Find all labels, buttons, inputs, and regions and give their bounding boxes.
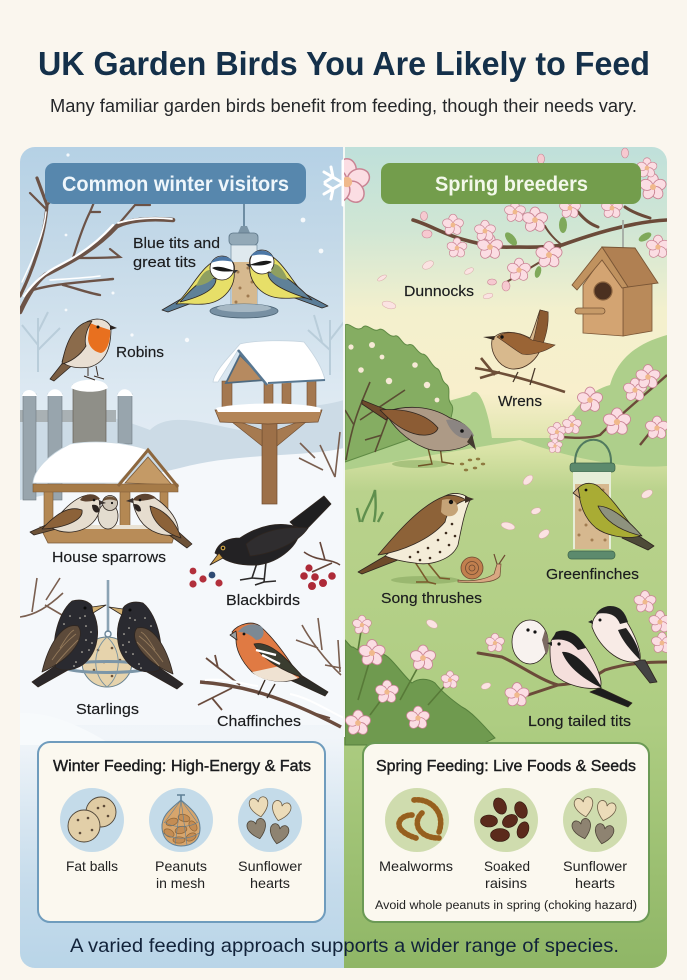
label: starlings: Starlings bbox=[76, 702, 139, 718]
icon: mealworms bbox=[385, 788, 449, 852]
green bush left bbox=[345, 324, 453, 462]
panel: infographic body bbox=[20, 147, 674, 968]
pale background bush bbox=[345, 335, 667, 470]
label: blackbirds: Blackbirds bbox=[226, 593, 300, 609]
seed scatter bbox=[460, 458, 485, 471]
label: dunnocks: Dunnocks bbox=[404, 284, 474, 300]
label: sunflower hearts: hearts bbox=[575, 875, 615, 891]
bird: blue tit bbox=[162, 256, 238, 312]
grass tuft bbox=[357, 490, 383, 522]
label: peanuts in mesh bbox=[155, 858, 207, 891]
berry twig bbox=[300, 542, 340, 590]
label: house sparrows: House sparrows bbox=[52, 550, 166, 566]
centre divider bbox=[343, 147, 345, 737]
bird: dunnock bbox=[362, 400, 476, 468]
panel: spring scene bbox=[344, 147, 674, 968]
label: peanuts in mesh: Peanuts bbox=[155, 858, 207, 874]
snow mound bbox=[20, 713, 112, 745]
bird: chaffinch bbox=[230, 623, 328, 698]
icon: sunflower hearts bbox=[563, 788, 627, 852]
label: soaked raisins: Soaked bbox=[484, 858, 530, 874]
bird: starlings bbox=[32, 600, 183, 689]
note: avoid whole peanuts: Avoid whole peanuts in spring (choking hazard) bbox=[375, 900, 637, 912]
label: fat balls: Fat balls bbox=[66, 858, 118, 874]
heading: spring breeders: Spring breeders bbox=[435, 173, 588, 196]
label: wrens: Wrens bbox=[498, 394, 542, 410]
panel: winter feeding bbox=[38, 742, 325, 922]
label: peanuts in mesh: in mesh bbox=[156, 875, 205, 891]
fence bbox=[20, 380, 133, 500]
label: chaffinches: Chaffinches bbox=[217, 714, 301, 730]
fat ball feeder bbox=[68, 580, 142, 688]
right blossom cluster bbox=[547, 365, 670, 454]
label: sunflower hearts: hearts bbox=[250, 875, 290, 891]
title: UK Garden Birds You Are Likely to Feed bbox=[38, 45, 650, 82]
bird: wren bbox=[475, 310, 565, 392]
label: blue tits and great tits: great tits bbox=[133, 255, 196, 271]
bird: long tailed tits bbox=[512, 606, 657, 707]
heading: common winter visitors bbox=[45, 163, 306, 204]
panel: winter scene bbox=[20, 147, 344, 968]
bird table bbox=[213, 341, 325, 504]
icon: soaked raisins bbox=[474, 788, 538, 852]
branch with blossoms: long tailed tits bbox=[478, 591, 674, 708]
subtitle: Many familiar garden birds benefit from feeding, though their needs vary. bbox=[50, 95, 637, 116]
birdhouse bbox=[572, 220, 658, 336]
snowflakes bbox=[64, 153, 324, 342]
bird: house sparrows bbox=[30, 494, 192, 548]
icon: fat balls bbox=[60, 788, 124, 852]
label: soaked raisins: raisins bbox=[485, 875, 527, 891]
blossom branch bbox=[413, 148, 671, 291]
label: sunflower hearts bbox=[563, 858, 627, 891]
snail bbox=[458, 554, 505, 582]
icon: half blossom bbox=[322, 159, 372, 206]
distant snowy hills bbox=[20, 400, 344, 510]
greenfinch feeder bbox=[568, 440, 615, 559]
bird: greenfinch bbox=[573, 483, 654, 550]
snow ground bbox=[20, 448, 343, 640]
falling petals bbox=[377, 259, 654, 691]
bird: blackbird bbox=[210, 496, 331, 585]
label: long tailed tits: Long tailed tits bbox=[528, 714, 631, 730]
heading: spring feeding: Spring Feeding: Live Foods & Seeds bbox=[376, 758, 636, 775]
house feeder bbox=[33, 442, 178, 543]
bottom left bush bbox=[344, 615, 495, 745]
heading: common winter visitors: Common winter visitors bbox=[62, 173, 289, 196]
label: sunflower hearts: Sunflower bbox=[563, 858, 627, 874]
label: blue tits and great tits bbox=[133, 236, 220, 271]
bush twigs bbox=[345, 382, 405, 460]
bush flowers bbox=[348, 342, 439, 402]
label: mealworms: Mealworms bbox=[379, 858, 453, 874]
label: soaked raisins bbox=[484, 858, 530, 891]
icon: sunflower hearts bbox=[238, 788, 302, 852]
bird: robin bbox=[50, 319, 117, 381]
hanging seed feeder bbox=[210, 204, 278, 318]
bare snowy tree bbox=[20, 178, 173, 312]
label: robins: Robins bbox=[116, 345, 164, 361]
berries on the ground bbox=[189, 568, 223, 588]
bird: great tit bbox=[246, 250, 328, 308]
label: sunflower hearts: Sunflower bbox=[238, 858, 302, 874]
heading: winter feeding: Winter Feeding: High-Energy & Fats bbox=[53, 758, 311, 775]
panel: spring feeding bbox=[363, 743, 649, 922]
footer statement: A varied feeding approach supports a wider range of species. bbox=[70, 935, 619, 957]
icon: peanuts in mesh bbox=[149, 788, 213, 852]
bird: song thrush bbox=[358, 493, 474, 584]
label: sunflower hearts bbox=[238, 858, 302, 891]
label: blue tits and great tits: Blue tits and bbox=[133, 236, 220, 252]
icon: half snowflake bbox=[324, 161, 343, 205]
heading: spring breeders bbox=[381, 163, 641, 204]
chaffinch branch bbox=[198, 655, 344, 727]
bare twigs bbox=[20, 432, 341, 675]
label: greenfinches: Greenfinches bbox=[546, 567, 639, 583]
label: song thrushes: Song thrushes bbox=[381, 591, 482, 607]
faded background trees bbox=[22, 312, 344, 375]
